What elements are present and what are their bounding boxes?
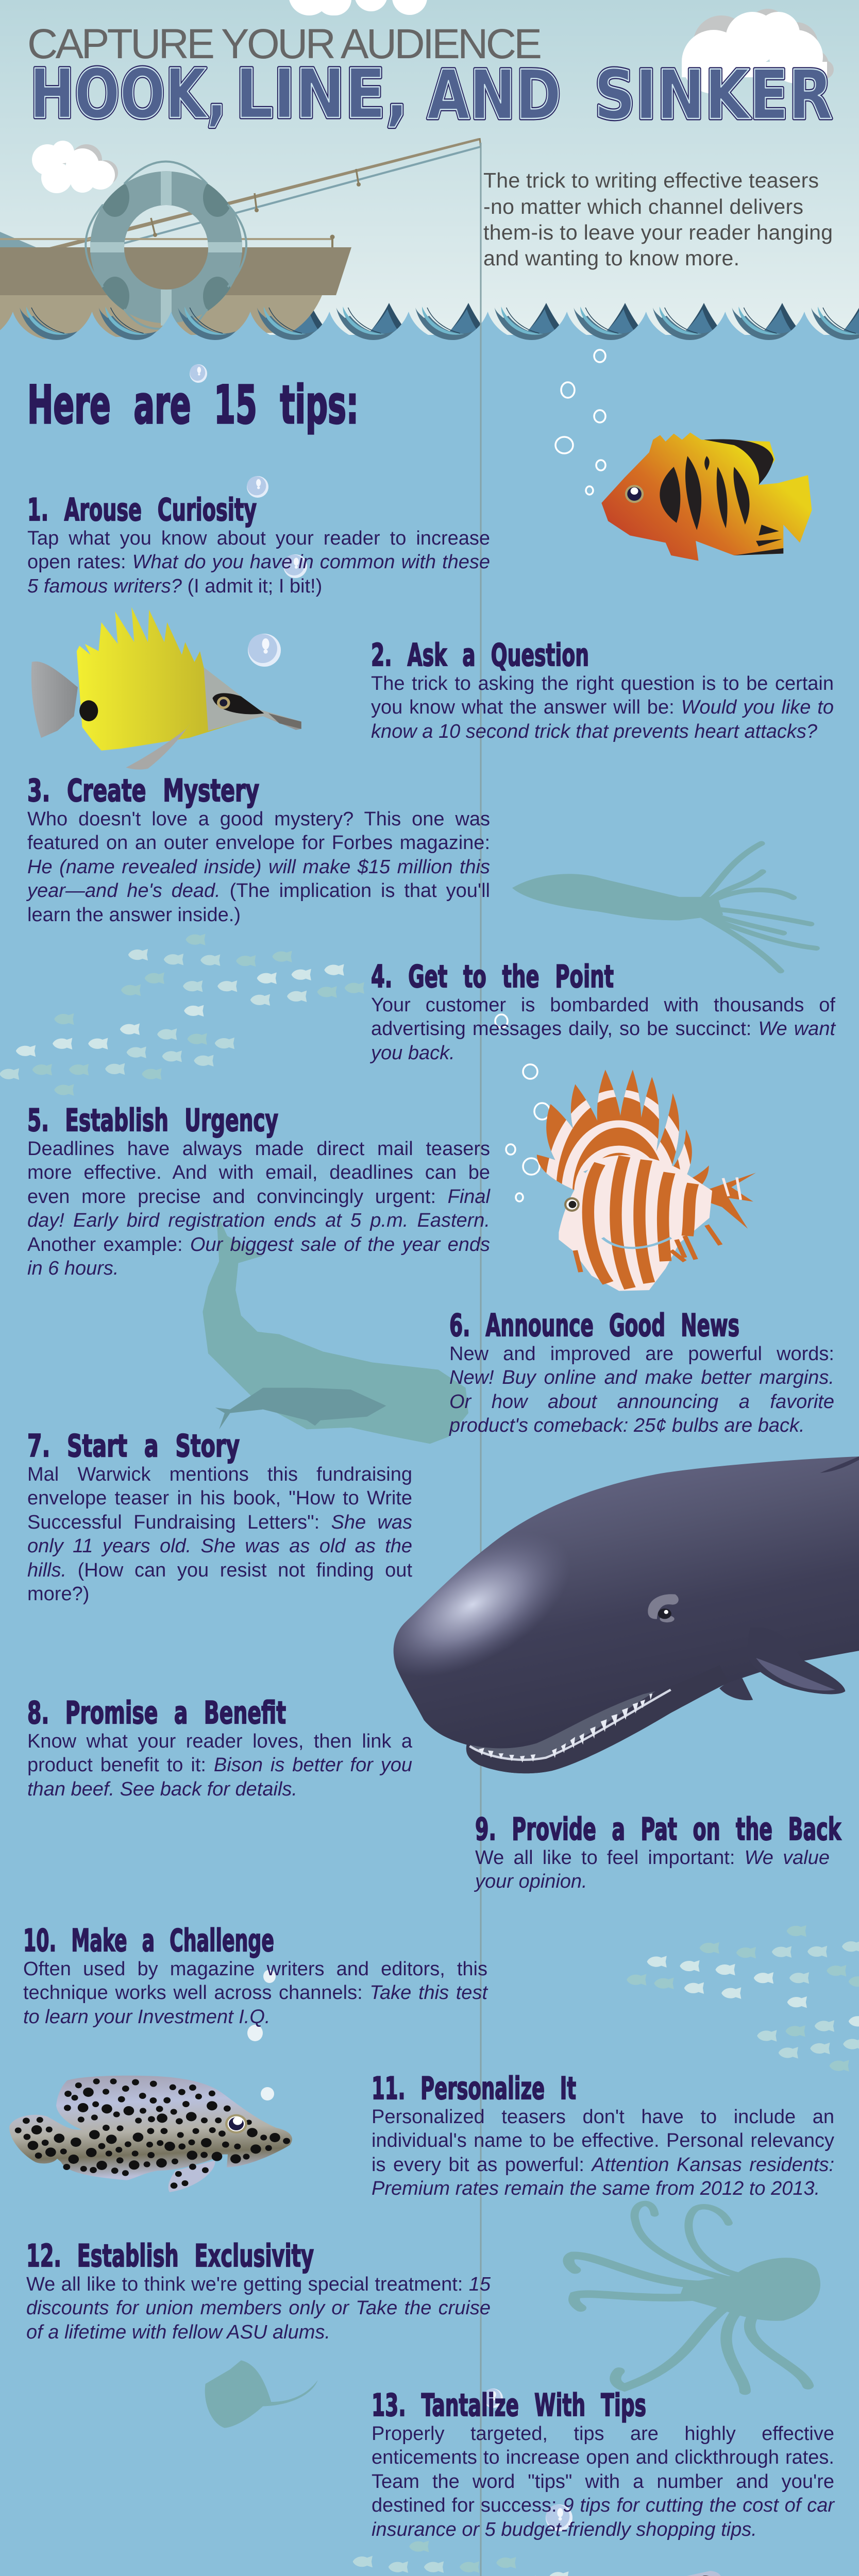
tip 8 — [27, 1695, 412, 1800]
tip 9: your opinion. — [475, 1871, 587, 1892]
tip 2 — [371, 637, 834, 742]
tip 10 — [23, 1923, 489, 2028]
tip 6: New! Buy online and make better margins. — [449, 1367, 834, 1388]
tip 13: 13. Tantalize With Tips — [372, 2387, 646, 2424]
tip 11: 11. Personalize It — [372, 2071, 576, 2107]
tip 3: 3. Create Mystery — [27, 773, 259, 809]
tip 7 — [27, 1428, 412, 1605]
silhouette: whale — [203, 1212, 468, 1444]
pearl bubbles — [247, 1970, 276, 2100]
fish school: left — [0, 934, 364, 1096]
tip 4: you back. — [371, 1042, 455, 1064]
tip 3: featured on an outer envelope for Forbes magazine: — [27, 832, 490, 854]
silhouette: octopus — [569, 2204, 820, 2391]
tip 4 — [370, 959, 836, 1064]
front waves and water surface — [0, 307, 859, 371]
tip 12: discounts for union members only or Take the cruise — [26, 2297, 491, 2319]
tip 7: only 11 years old. She was as old as the — [27, 1535, 412, 1557]
tip 13: Properly targeted, tips are highly effective — [372, 2422, 834, 2444]
boat hull — [0, 247, 351, 340]
glass bubbles — [190, 364, 572, 2576]
tip 13: Team the word "tips" with a number and you're — [372, 2471, 834, 2493]
tip 5: even more precise and convincingly urgent: Final — [27, 1186, 490, 1208]
tip 8: 8. Promise a Benefit — [27, 1695, 286, 1731]
fish: yellow longnose — [31, 607, 301, 770]
tip 1: open rates: What do you have in common with these — [27, 551, 490, 573]
tip 8: product benefit to it: Bison is better for you — [27, 1754, 412, 1776]
cloud: top right — [682, 9, 834, 94]
tip 6: New and improved are powerful words: — [449, 1343, 834, 1364]
sky background — [0, 0, 859, 340]
tip 11: Premium rates remain the same from 2012 to 2013. — [372, 2178, 820, 2199]
tip 4: Your customer is bombarded with thousands of — [371, 994, 835, 1016]
tip 6: Or how about announcing a favorite — [449, 1391, 834, 1413]
tip 12 — [26, 2238, 491, 2343]
title: hook, line, and sinker: AND — [427, 56, 561, 135]
tip 11: is every bit as powerful: Attention Kansas residents: — [372, 2154, 834, 2176]
tip 7: more?) — [27, 1583, 89, 1605]
tip 8: than beef. See back for details. — [27, 1778, 297, 1800]
intro paragraph: and wanting to know more. — [483, 246, 739, 270]
life ring — [86, 162, 246, 330]
tip 6: product's comeback: 25¢ bulbs are back. — [449, 1415, 805, 1436]
tip 13: insurance or 5 budget-friendly shopping tips. — [372, 2519, 757, 2540]
fish school: right — [627, 1925, 859, 2072]
fish: butterfly with orange face — [542, 2571, 762, 2576]
cloud: top centre — [289, 0, 427, 15]
tip 6 — [449, 1308, 834, 1436]
tip 8: Know what your reader loves, then link a — [27, 1730, 412, 1752]
tip 3: He (name revealed inside) will make $15 million this — [27, 856, 490, 878]
tip 11 — [372, 2071, 834, 2199]
tip 4: advertising messages daily, so be succinct: We want — [371, 1018, 835, 1040]
title: hook, line, and sinker: LINE, — [235, 55, 408, 134]
tip 5: Deadlines have always made direct mail teasers — [27, 1138, 490, 1159]
tip 13 — [372, 2387, 835, 2540]
tip 1: 5 famous writers? (I admit it; I bit!) — [27, 575, 322, 597]
boat rail and mast stay — [0, 232, 335, 248]
tip 11: individual's name to be effective. Personal relevancy — [372, 2130, 834, 2151]
tip 10: 10. Make a Challenge — [23, 1923, 274, 1959]
title: hook, line, and sinker — [30, 55, 833, 135]
silhouette: ray — [205, 2360, 318, 2428]
ring bubbles near top — [495, 350, 605, 1201]
tip 1: 1. Arouse Curiosity — [27, 492, 257, 528]
tip 12: of a lifetime with fellow ASU alums. — [26, 2321, 330, 2343]
tip 12: We all like to think we're getting special treatment: 15 — [26, 2273, 491, 2295]
tip 7: envelope teaser in his book, "How to Write — [27, 1487, 412, 1509]
tip 2: know a 10 second trick that prevents heart attacks? — [371, 721, 817, 742]
silhouette: squid — [512, 843, 816, 971]
tip 9 — [474, 1811, 842, 1892]
tip 3: Who doesn't love a good mystery? This one was — [27, 808, 490, 829]
tip 5: in 6 hours. — [27, 1258, 119, 1279]
tip 3 — [26, 773, 490, 926]
tip 10: technique works well across channels: Take this test — [23, 1982, 487, 2004]
tip 13: enticements to increase open and clickthrough rates. — [372, 2447, 834, 2468]
intro paragraph: The trick to writing effective teasers — [483, 168, 819, 192]
intro paragraph: -no matter which channel delivers — [483, 195, 803, 218]
tip 5: Another example: Our biggest sale of the year ends — [27, 1234, 490, 1256]
title: hook, line, and sinker: AND — [427, 56, 561, 135]
tip 13: destined for success: 9 tips for cutting the cost of car — [372, 2495, 834, 2516]
tip 1: Tap what you know about your reader to increase — [27, 528, 490, 549]
tip 4: 4. Get to the Point — [371, 959, 614, 995]
tip 5 — [27, 1103, 491, 1279]
tip 7: Mal Warwick mentions this fundraising — [27, 1463, 412, 1485]
fish: lionfish — [537, 1070, 756, 1292]
fishing line — [480, 143, 481, 2576]
title: hook, line, and sinker: HOOK, — [30, 55, 227, 134]
cloud: left — [32, 141, 118, 193]
fish school: lower — [221, 2540, 589, 2576]
tip 12: 12. Establish Exclusivity — [26, 2238, 314, 2274]
tip 1 — [27, 492, 490, 597]
intro paragraph — [483, 168, 833, 270]
tip 2: The trick to asking the right question is to be certain — [371, 673, 834, 694]
tip 3: year—and he's dead. (The implication is that you'll — [27, 880, 490, 902]
title: capture your audience: CAPTURE YOUR AUDIENCE — [27, 21, 542, 67]
back waves — [287, 303, 859, 335]
tip 2: you know what the answer will be: Would you like to — [371, 697, 834, 718]
title: hook, line, and sinker: HOOK, — [30, 55, 227, 134]
tip 10: Often used by magazine writers and editors, this — [23, 1958, 487, 1979]
title: hook, line, and sinker: LINE, — [235, 55, 408, 134]
tip 2: 2. Ask a Question — [371, 637, 589, 673]
tip 11: Personalized teasers don't have to include an — [372, 2106, 834, 2128]
tip 7: 7. Start a Story — [27, 1428, 240, 1464]
fish: spotted grouper — [9, 2076, 292, 2192]
intro paragraph: them-is to leave your reader hanging — [483, 221, 833, 244]
tip 3: learn the answer inside.) — [27, 904, 241, 926]
tip 10: to learn your Investment I.Q. — [23, 2006, 270, 2028]
sperm whale — [349, 1456, 859, 1773]
tip 5: more effective. And with email, deadlines can be — [27, 1162, 490, 1183]
tip 5: day! Early bird registration ends at 5 p.m. Eastern. — [27, 1210, 490, 1231]
tip 5: 5. Establish Urgency — [27, 1103, 278, 1139]
tip 7: hills. (How can you resist not finding out — [27, 1560, 412, 1581]
fishing rod — [45, 138, 481, 248]
tip 9: We all like to feel important: We value — [475, 1846, 830, 1868]
tip 7: Successful Fundraising Letters": She was — [27, 1512, 412, 1533]
fish: tiger — [601, 432, 812, 561]
heading: here are 15 tips: Here are 15 tips: — [27, 375, 359, 436]
